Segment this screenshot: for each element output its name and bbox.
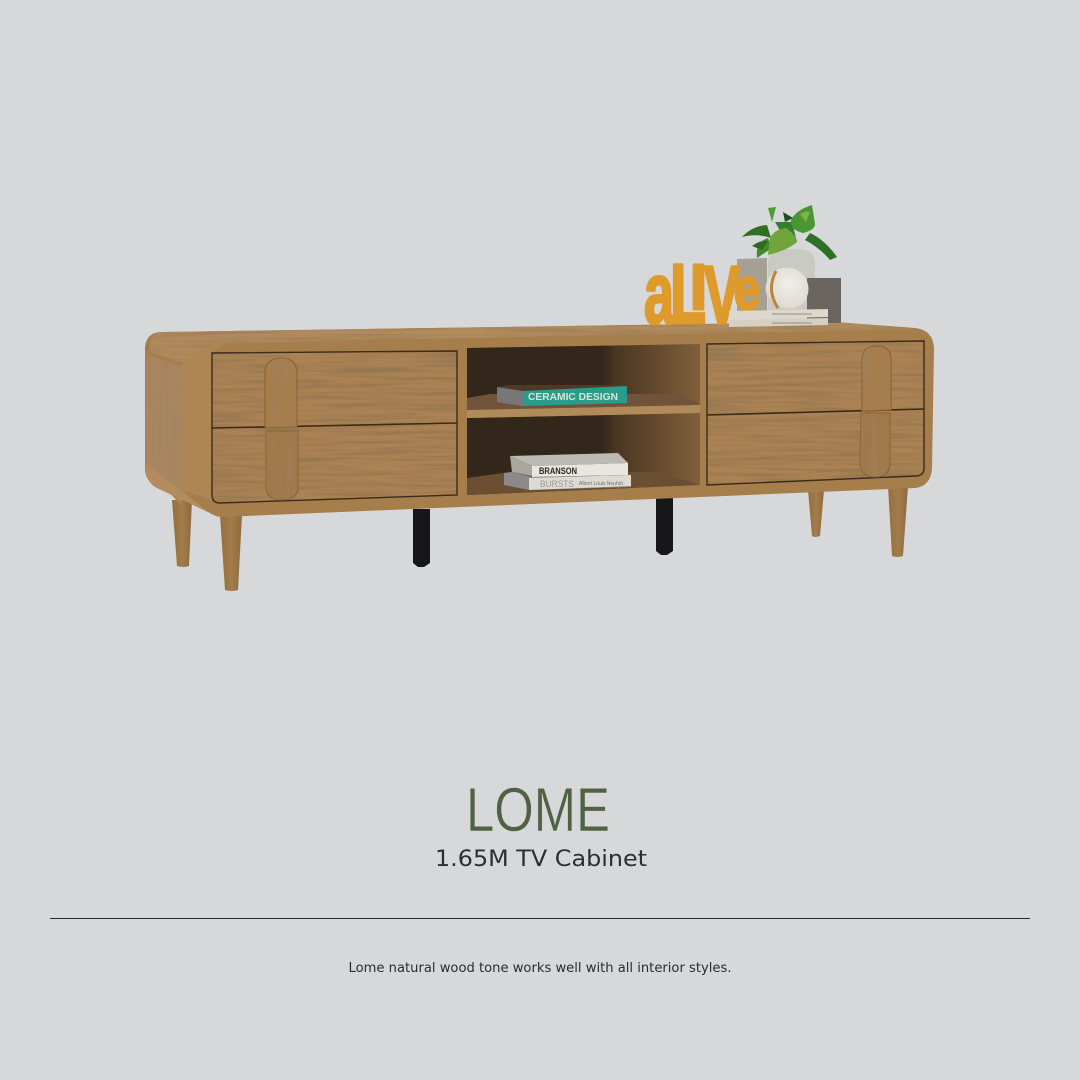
stone vases: [737, 249, 841, 323]
legs: [172, 486, 908, 591]
plant: [742, 205, 837, 260]
alive sign: a: [644, 246, 675, 342]
subtitle: 1.65M TV Cabinet: [435, 847, 647, 872]
books: Branson and Bursts: Albert Louis Neuhirt: [579, 481, 624, 487]
alive sign: V: [704, 250, 740, 341]
title: LOME: [466, 776, 610, 845]
right drawers: [707, 340, 925, 487]
books: Branson and Bursts: BURSTS: [540, 479, 574, 490]
alive sign: I: [690, 251, 707, 323]
book: Ceramic Design: CERAMIC DESIGN: [528, 391, 618, 403]
decor on cabinet: [644, 205, 841, 342]
small stacked books: [729, 309, 828, 327]
right handles: [859, 345, 892, 478]
cabinet: [145, 320, 934, 591]
alive sign: e: [734, 257, 760, 322]
caption: Lome natural wood tone works well with all interior styles.: [348, 961, 732, 976]
alive sign: [644, 246, 760, 342]
infographic canvas: [50, 205, 1030, 975]
divider: [50, 918, 1030, 919]
book: Ceramic Design: [497, 385, 627, 406]
alive sign: L: [670, 247, 706, 341]
books: Branson and Bursts: BRANSON: [539, 466, 577, 477]
cabinet body: [145, 320, 934, 517]
left handles: [264, 357, 299, 501]
books: Branson and Bursts: [504, 453, 631, 490]
left drawers: [212, 350, 458, 505]
open shelves: [467, 344, 700, 495]
marble ball: [766, 268, 808, 310]
